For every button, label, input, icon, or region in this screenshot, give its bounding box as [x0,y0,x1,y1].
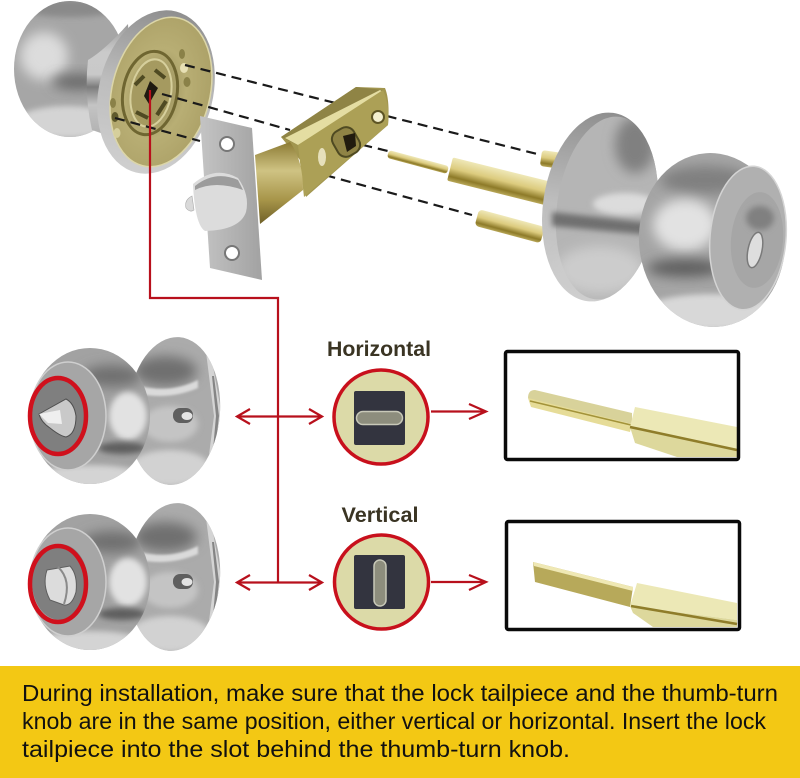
knob: thumb-turn vertical [30,500,225,657]
latch bolt [193,173,247,231]
knob with tailpiece and mounting pins, top right [387,105,792,332]
latch case [281,87,389,197]
red connector lines and arrows, left [150,90,322,590]
thumb-turn [45,566,76,605]
tailpiece [387,150,449,174]
knob with exposed brass back plate, top left [14,1,215,174]
heading: Horizontal: Horizontal [327,337,431,361]
inset: vertical tailpiece [506,522,740,630]
arrow to vertical tailpiece [431,575,486,590]
end cap [704,163,792,313]
dashed alignment guides [115,65,541,215]
instruction text: During installation, make sure that the lock tailpiece and the thumb-turn [22,680,778,706]
red highlight ring [30,546,86,622]
instruction text: knob are in the same position, either vertical or horizontal. Insert the lock [22,708,766,734]
latch assembly [186,87,389,280]
arrow to horizontal tailpiece [431,404,486,419]
inset: horizontal tailpiece [506,352,738,460]
heading: Vertical: Vertical [342,503,418,527]
knob: thumb-turn horizontal [30,334,225,491]
red highlight ring [30,378,86,454]
back plate [530,105,670,309]
instruction banner [0,666,800,778]
thumb-turn [39,399,76,437]
brass cylinder [255,142,303,224]
top pin [540,150,568,170]
strike plate [200,116,262,280]
instruction text [22,680,778,762]
slot icon: horizontal [334,370,428,464]
bottom pin [475,209,545,243]
instruction text: tailpiece into the slot behind the thumb-turn knob. [22,736,570,762]
slot icon: vertical [334,535,428,629]
ball [633,148,791,332]
